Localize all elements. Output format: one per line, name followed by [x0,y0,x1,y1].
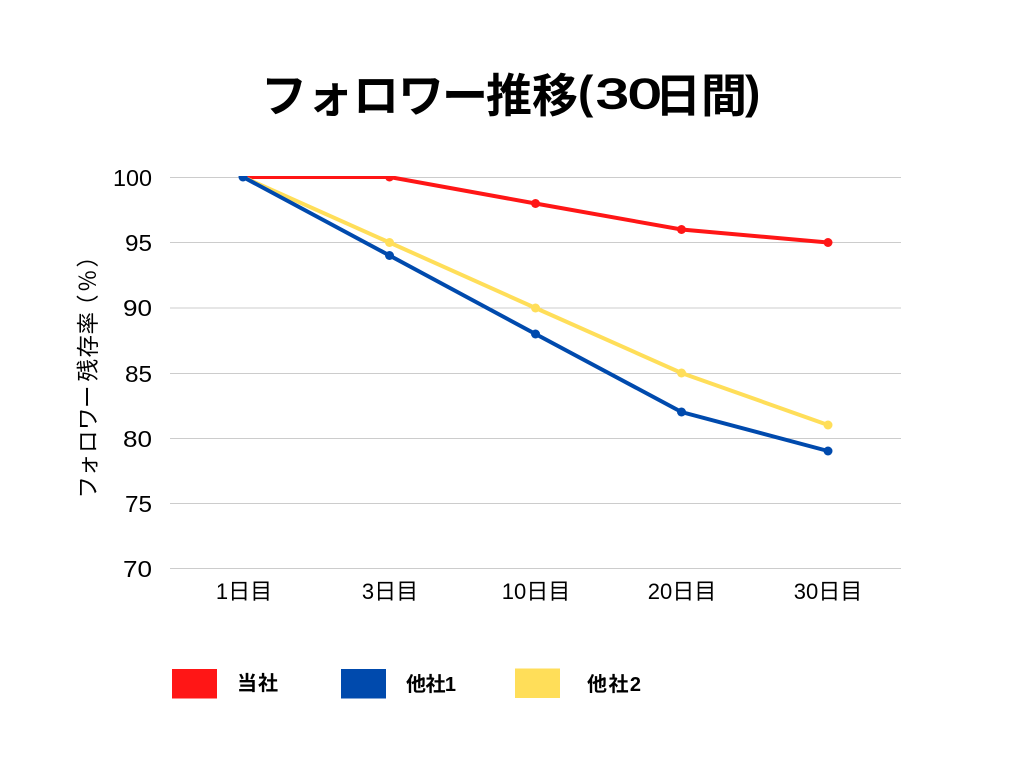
title: フォロワー推移 [261,70,578,122]
y axis labels: 70 [123,556,152,582]
title [261,66,760,122]
x axis labels: 1日目 [216,579,272,604]
series: 当社 [243,172,832,247]
y axis labels [113,165,152,582]
y axis labels: 100 [113,165,152,191]
legend: 他社1: 他社1 [406,673,456,696]
title: 30 [596,70,661,117]
x axis labels: 3日目 [362,579,418,604]
x axis labels: 10日目 [502,579,570,604]
legend: 他社2: 他社2 [587,673,641,696]
title: ( [578,66,594,118]
legend: 他社2 [515,668,641,698]
series: 他社1 [238,172,832,456]
y axis labels: 75 [125,491,152,517]
legend: 他社1 [341,669,456,698]
legend: 当社: 当社 [237,672,278,695]
x axis labels: 20日目 [648,579,716,604]
x axis labels: 30日目 [794,579,862,604]
x axis labels [216,579,862,604]
series: 他社2 [243,177,832,430]
y axis labels: 80 [123,426,152,452]
y axis labels: 95 [125,230,152,256]
line chart series [238,172,832,456]
title: ) [745,66,760,118]
legend: 当社 [172,669,278,698]
title: 日間 [655,70,747,122]
y axis title: フォロワー残存率（％） [76,245,101,498]
legend [172,668,641,698]
y axis labels: 90 [123,295,152,321]
y axis labels: 85 [125,361,152,387]
